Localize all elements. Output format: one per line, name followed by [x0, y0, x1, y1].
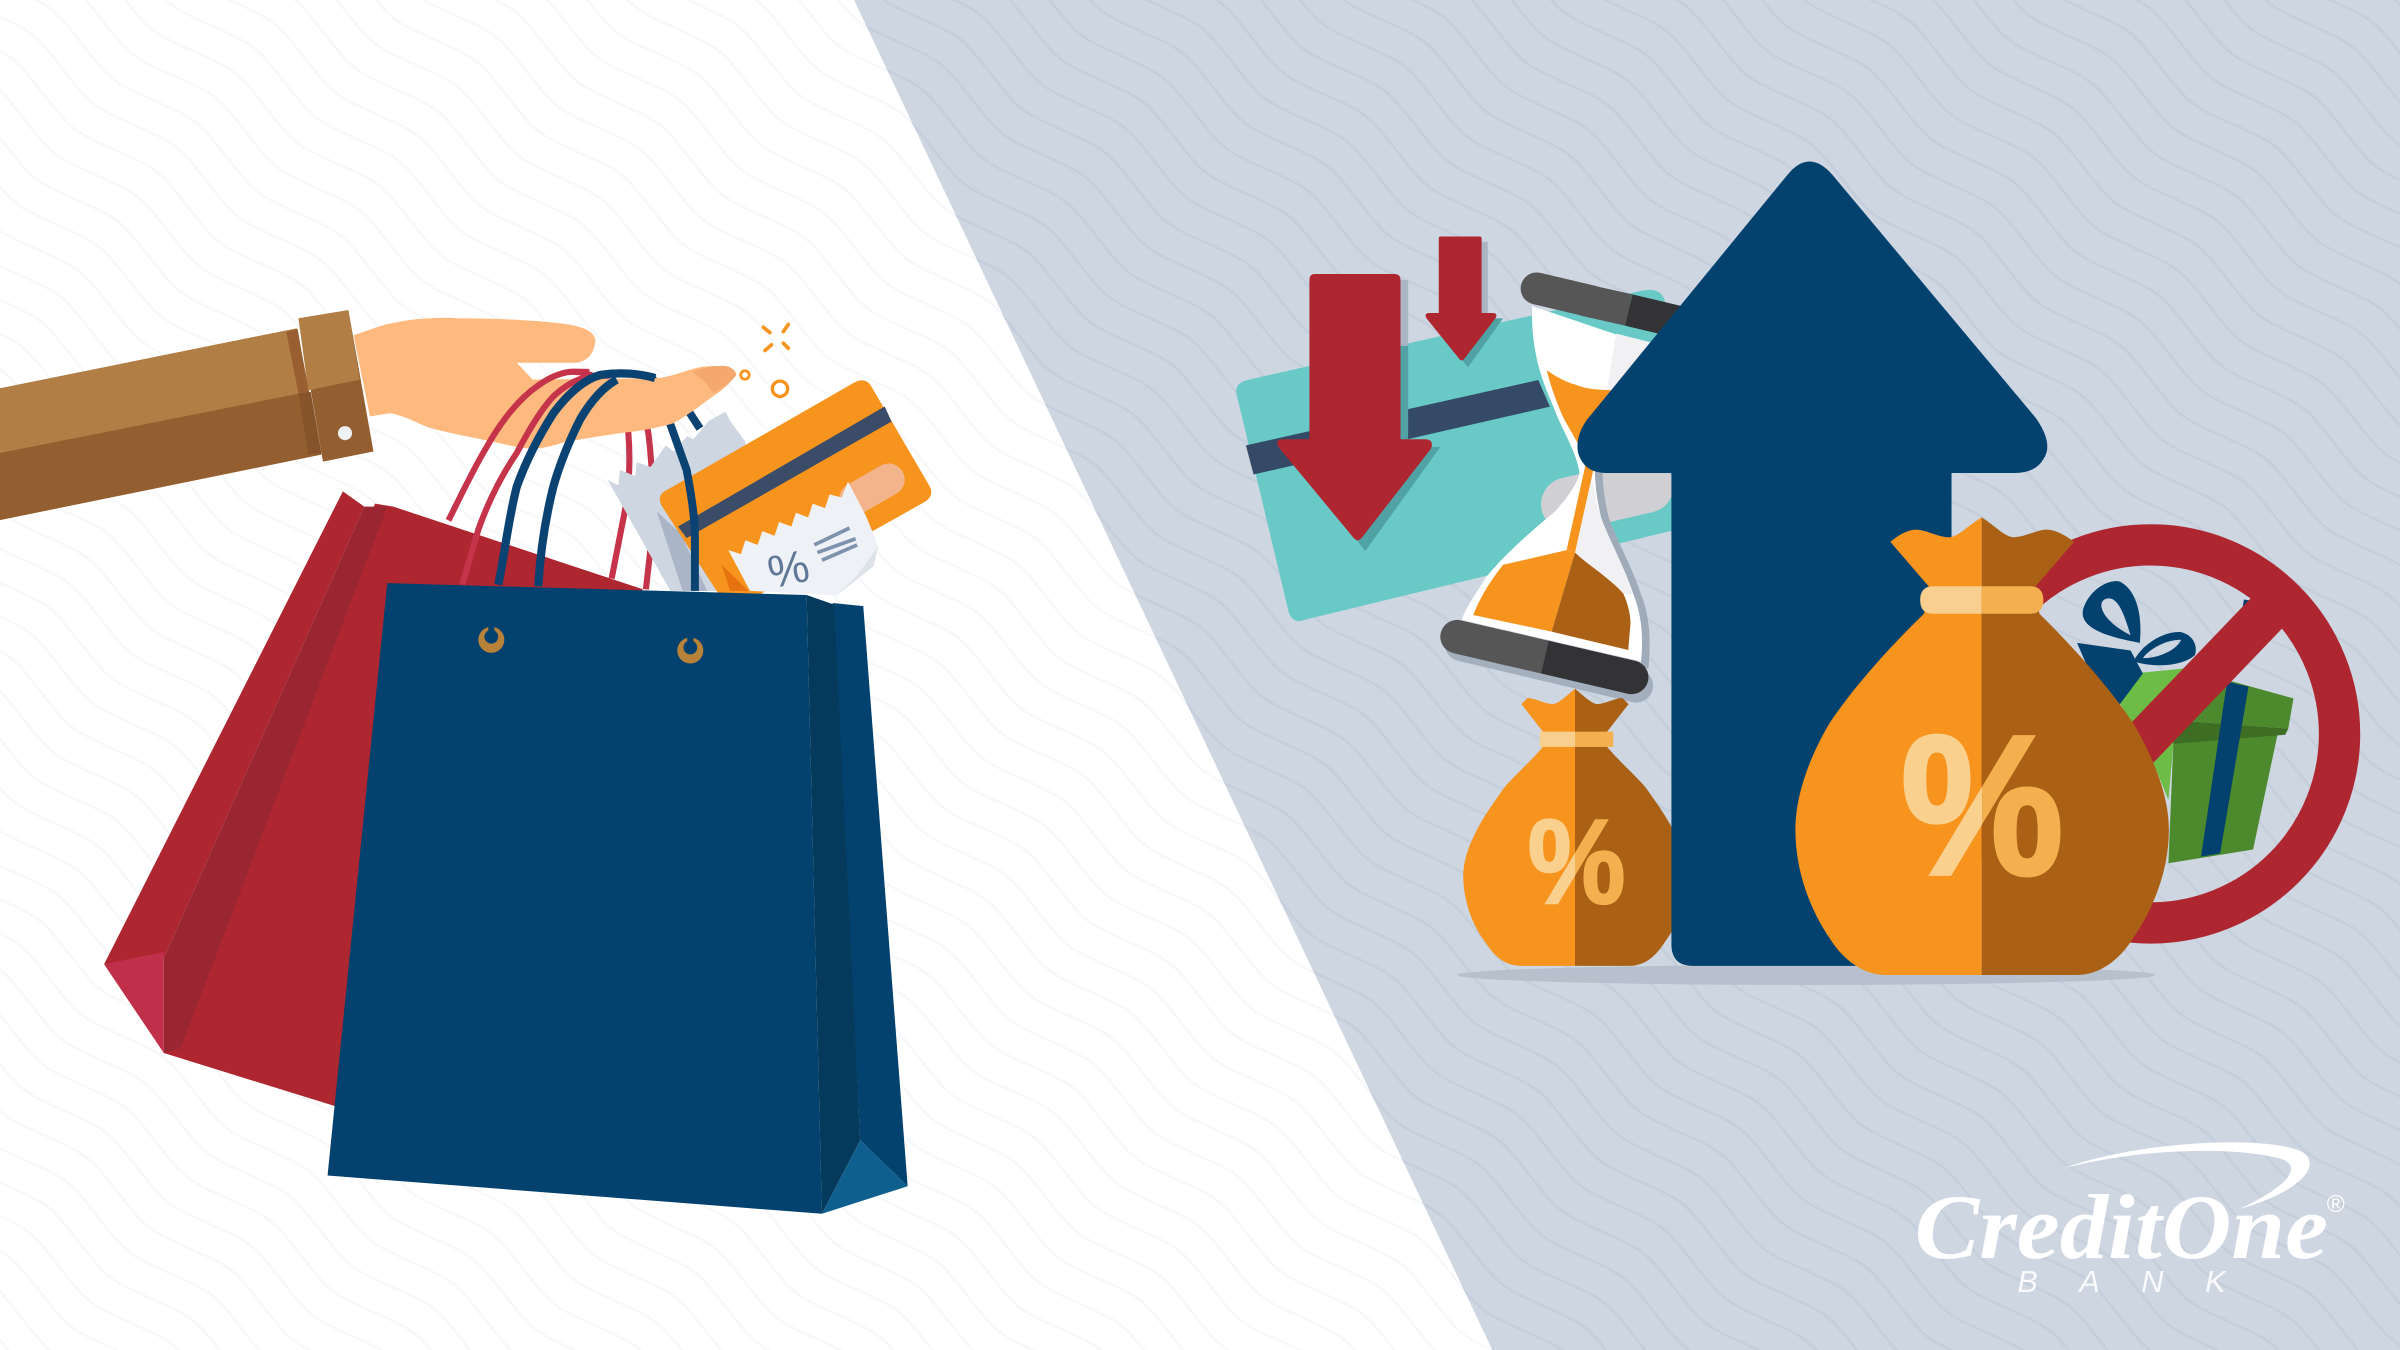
bag grommet left: [478, 624, 504, 653]
red prohibition sign: [1961, 545, 2340, 923]
red shopping bag: [104, 491, 643, 1107]
hand: [354, 318, 736, 448]
hourglass sand stream: [1567, 464, 1593, 553]
large red down arrow: [1277, 274, 1440, 551]
logo swoosh: [2065, 1142, 2310, 1209]
registered mark: ®: [2327, 1191, 2345, 1218]
orange credit card: [660, 380, 931, 600]
grey receipt behind card: [608, 412, 758, 591]
hourglass bottom cap: [1457, 637, 1636, 686]
hourglass glass body: [1462, 306, 1668, 661]
hourglass top sand: [1547, 370, 1622, 468]
hourglass top cap: [1537, 289, 1702, 328]
bag grommet right: [677, 635, 703, 664]
illustration: hand holding shopping bags: [0, 310, 931, 1214]
large percent money bag: [1795, 517, 2169, 975]
hourglass bottom sand: [1473, 550, 1630, 650]
teal credit card: [1236, 290, 1714, 621]
large navy up arrow: [1577, 161, 2047, 966]
logo subtitle: BANK: [2017, 1265, 2227, 1299]
sparkle marks: [741, 324, 788, 396]
white receipt with percent sign: [728, 482, 878, 598]
arm: brown sleeve and cuff: [0, 310, 373, 520]
logo: Credit One Bank: [1915, 1142, 2345, 1299]
small percent money bag: %: [1528, 796, 1625, 929]
logo wordmark: CreditOne: [1915, 1176, 2328, 1278]
large percent money bag: %: [1901, 694, 2064, 917]
navy shopping bag: [328, 583, 908, 1214]
large percent money bag: %: [1901, 694, 2064, 917]
bag handles, near side over the hand: [448, 372, 655, 586]
gift box: [2077, 581, 2293, 863]
hourglass: [1457, 289, 1702, 686]
cuff button: [338, 426, 352, 440]
navy bag handles, far side: [652, 378, 700, 591]
background: right blue-grey diagonal panel: [854, 0, 2400, 1350]
small red down arrow: [1426, 236, 1503, 367]
small percent money bag: %: [1528, 796, 1625, 929]
gift ribbon bow: [2077, 581, 2247, 704]
hourglass shadow: [1595, 468, 1650, 669]
small percent money bag: [1457, 689, 2155, 985]
illustration: rising interest rates and lost rewards: [1236, 161, 2340, 985]
hourglass glass shaded parts: [1575, 334, 1665, 594]
white receipt with percent sign: %: [763, 539, 814, 598]
red bag handles, far side: [574, 372, 653, 589]
